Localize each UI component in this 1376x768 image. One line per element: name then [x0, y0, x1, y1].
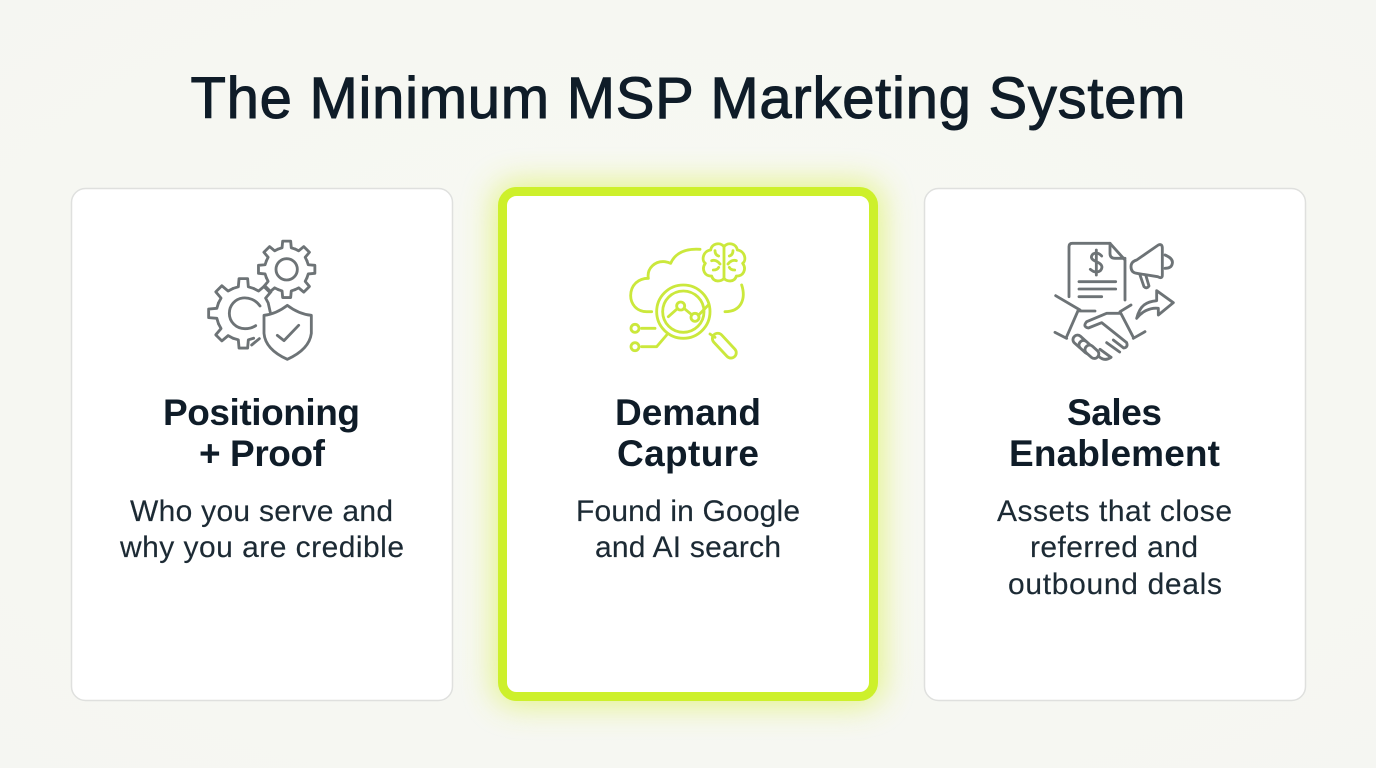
- heading: Capture: [617, 433, 759, 474]
- description: Who you serve and: [130, 495, 393, 528]
- panel: demand capture (highlighted): [494, 183, 882, 705]
- shield with check: [264, 305, 311, 359]
- document: [1069, 243, 1125, 300]
- icon: document, megaphone and handshake: [1055, 243, 1173, 360]
- cloud: [631, 249, 743, 312]
- description: why you are credible: [119, 531, 404, 564]
- arrow: [1137, 291, 1173, 318]
- panel: sales enablement: [924, 188, 1306, 700]
- heading: Positioning: [163, 392, 360, 433]
- heading: [163, 392, 360, 474]
- small gear: [258, 241, 315, 298]
- description: referred and: [1030, 531, 1198, 564]
- megaphone: [1131, 245, 1172, 288]
- description: [119, 495, 404, 564]
- heading: [1009, 392, 1220, 474]
- description: [576, 495, 800, 564]
- description: outbound deals: [1008, 568, 1222, 601]
- card background: [502, 192, 874, 696]
- brain: [703, 244, 745, 281]
- description: Found in Google: [576, 495, 800, 528]
- circuit nodes: [631, 324, 667, 351]
- magnifier: [657, 285, 738, 360]
- card glow: [494, 183, 882, 705]
- heading: [615, 392, 761, 474]
- description: Assets that close: [997, 495, 1232, 528]
- heading: + Proof: [199, 433, 326, 474]
- heading: Demand: [615, 392, 761, 433]
- trend line: [668, 302, 708, 321]
- card background: [72, 188, 452, 700]
- handshake: [1055, 296, 1145, 360]
- heading: Enablement: [1009, 433, 1220, 474]
- large gear: [209, 279, 281, 348]
- title: The Minimum MSP Marketing System: [190, 66, 1186, 131]
- panel: positioning + proof: [72, 188, 452, 700]
- heading: Sales: [1067, 392, 1162, 433]
- card background: [924, 188, 1306, 700]
- icon: cloud, brain and magnifier: [631, 244, 745, 360]
- description: and AI search: [595, 531, 781, 564]
- icon: gears and shield: [209, 241, 315, 359]
- description: [997, 495, 1232, 601]
